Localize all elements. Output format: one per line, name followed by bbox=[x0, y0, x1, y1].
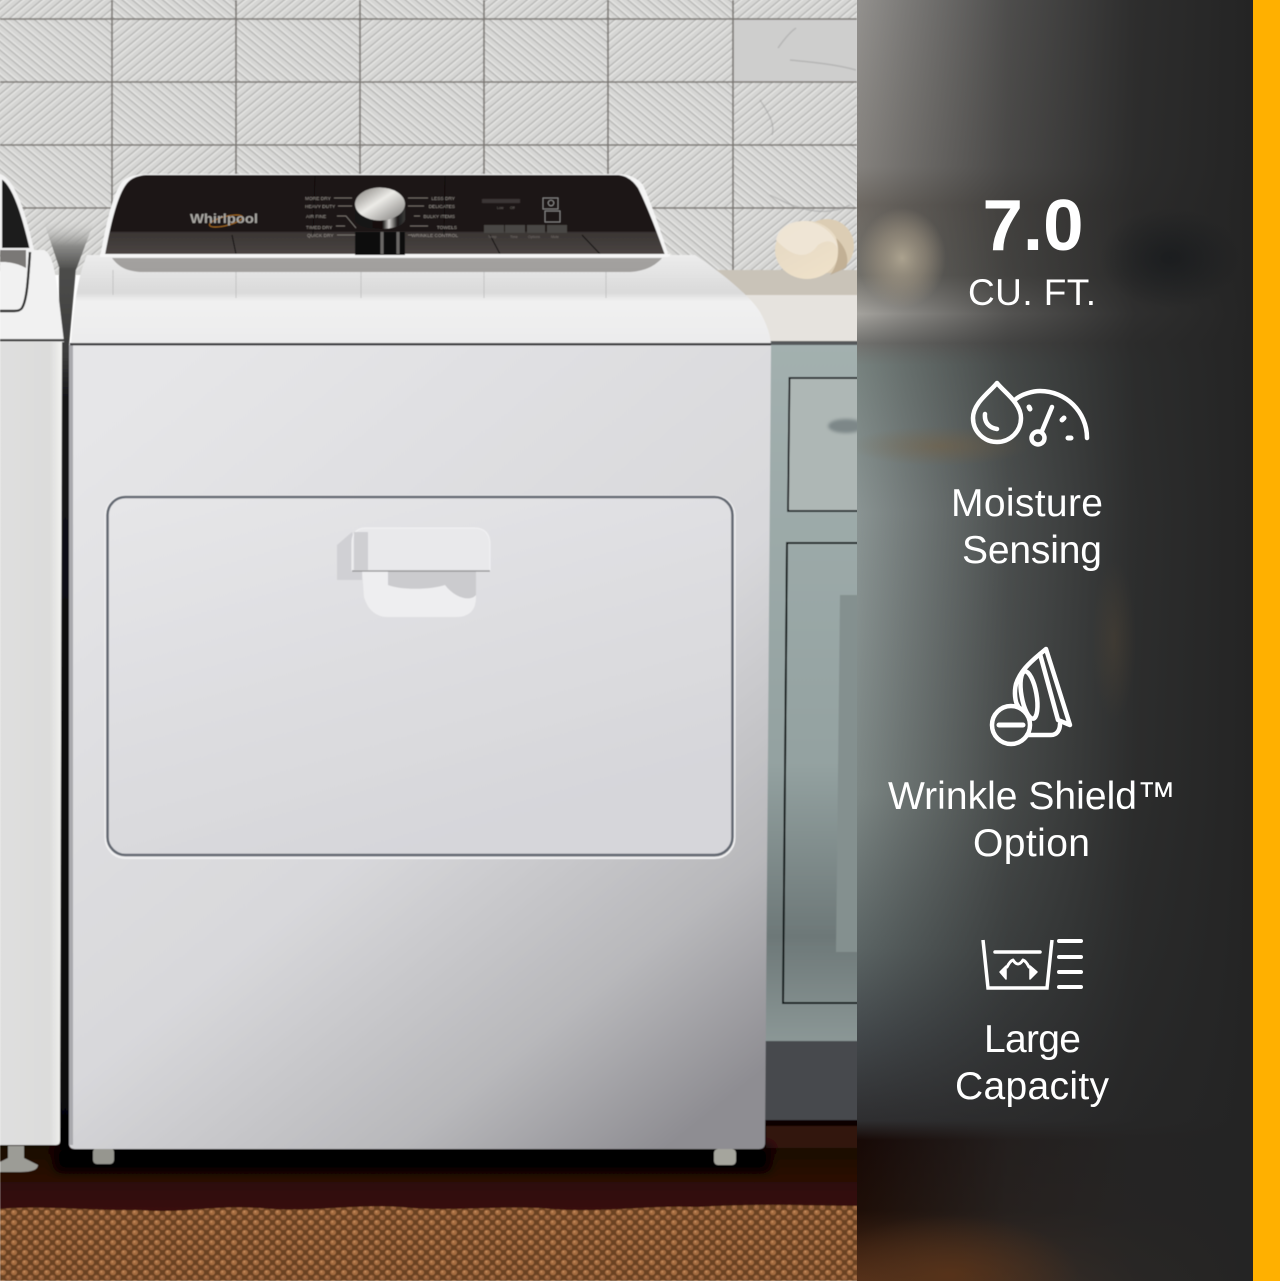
capacity figure: CU. FT. bbox=[968, 272, 1096, 313]
icon: large capacity basin bbox=[983, 940, 1081, 988]
cycle labels: TOWELS bbox=[437, 225, 457, 231]
cycle labels: DELICATES bbox=[429, 204, 455, 210]
cycle labels: WRINKLE CONTROL bbox=[411, 233, 458, 239]
rug bbox=[0, 1205, 860, 1281]
selector knob bbox=[355, 188, 405, 255]
label: large capacity: Capacity bbox=[955, 1065, 1110, 1108]
label: moisture sensing: Sensing bbox=[962, 529, 1102, 572]
accent bar bbox=[1253, 0, 1280, 1281]
control buttons: Low bbox=[497, 206, 504, 210]
cycle labels: TIMED DRY bbox=[306, 225, 333, 231]
icon: iron with minus bbox=[992, 649, 1070, 744]
door handle bbox=[337, 528, 490, 617]
control console bbox=[100, 174, 670, 257]
cycle labels bbox=[305, 196, 458, 239]
label: large capacity bbox=[955, 1018, 1110, 1108]
capacity figure: 7.0 bbox=[982, 186, 1084, 266]
label: wrinkle shield: Option bbox=[973, 822, 1090, 865]
label: moisture sensing bbox=[951, 482, 1103, 572]
cycle labels: HEAVY DUTY bbox=[305, 204, 336, 210]
control buttons: Time bbox=[510, 235, 518, 239]
dryer lid bbox=[71, 255, 771, 344]
photo scene bbox=[0, 0, 864, 1281]
left washer bbox=[0, 176, 736, 1172]
control buttons: Off bbox=[510, 206, 515, 210]
control buttons bbox=[482, 198, 567, 239]
cabinet bbox=[765, 345, 864, 1126]
label: wrinkle shield: Wrinkle Shield™ bbox=[888, 775, 1176, 818]
icon: moisture gauge bbox=[973, 383, 1087, 444]
cycle labels: LESS DRY bbox=[431, 196, 456, 202]
control buttons: Temp bbox=[488, 235, 497, 239]
cycle labels: BULKY ITEMS bbox=[423, 214, 455, 220]
label: large capacity: Large bbox=[984, 1018, 1081, 1061]
feature panel bbox=[820, 0, 1253, 1281]
cycle labels: QUICK DRY bbox=[307, 233, 334, 239]
floor bbox=[0, 1120, 861, 1215]
counter and stone balls bbox=[700, 219, 860, 345]
tiled wall bbox=[0, 0, 860, 275]
label: wrinkle shield bbox=[888, 775, 1176, 865]
cycle labels: AIR FINE bbox=[306, 214, 326, 220]
frosted backdrop bbox=[820, 0, 1253, 1281]
brand logo: Whirlpool bbox=[190, 211, 258, 226]
dryer cabinet body bbox=[69, 345, 771, 1149]
capacity figure bbox=[968, 186, 1096, 313]
cycle labels: MORE DRY bbox=[305, 196, 332, 202]
dryer bbox=[69, 174, 771, 1149]
label: moisture sensing: Moisture bbox=[951, 482, 1103, 525]
dryer door bbox=[106, 496, 734, 858]
gap between appliances bbox=[44, 222, 94, 270]
control buttons: Options bbox=[528, 235, 540, 239]
control buttons: Mute bbox=[551, 235, 559, 239]
